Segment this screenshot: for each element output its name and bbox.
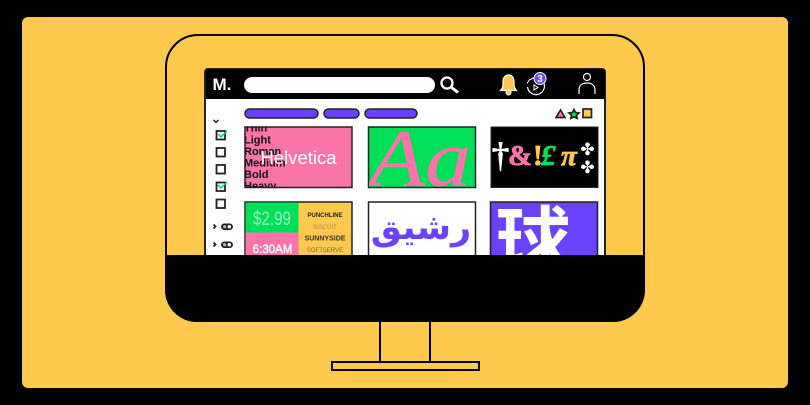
card: type samples bbox=[245, 202, 352, 262]
card: ornamental glyphs: £ bbox=[540, 140, 556, 172]
card: Helvetica weights: Medium bbox=[244, 158, 286, 170]
card: Helvetica weights bbox=[244, 122, 352, 192]
icon: history with badge: 3 bbox=[537, 74, 543, 85]
font names: BISCUIT bbox=[313, 225, 337, 231]
card: Helvetica weights: Light bbox=[244, 134, 271, 146]
sidebar filters bbox=[214, 120, 233, 248]
card: ornamental glyphs: π bbox=[561, 140, 578, 172]
icon: bell bbox=[500, 75, 516, 95]
filter pills bbox=[245, 109, 417, 118]
chevron bbox=[214, 120, 218, 122]
checkboxes bbox=[216, 131, 225, 208]
icon: user bbox=[579, 74, 595, 94]
card: Helvetica weights: Bold bbox=[244, 169, 268, 181]
shape filter icons bbox=[556, 109, 592, 118]
card: Arabic sample: رشيق bbox=[371, 208, 471, 248]
card: Helvetica weights: Helvetica bbox=[260, 147, 337, 168]
check marks bbox=[218, 131, 227, 188]
toggle rows bbox=[214, 224, 233, 248]
icon: history with badge bbox=[527, 72, 546, 95]
card: CJK glyph: 球 bbox=[495, 182, 571, 290]
card: Helvetica weights: Heavy bbox=[244, 180, 277, 192]
card: ornamental glyphs bbox=[491, 127, 598, 188]
search field bbox=[244, 77, 435, 93]
font names: PUNCHLINE bbox=[307, 213, 343, 219]
font names: SOFTSERVE bbox=[307, 248, 343, 254]
card: ornamental glyphs: ✤ bbox=[580, 158, 595, 177]
header bar bbox=[206, 69, 605, 99]
card: ornamental glyphs: ! bbox=[533, 140, 543, 172]
card: Arabic sample bbox=[368, 202, 476, 262]
logo: M. bbox=[212, 75, 231, 94]
card: ornamental glyphs: & bbox=[508, 140, 532, 172]
card: ornamental glyphs: ✤ bbox=[580, 140, 595, 159]
monitor black chin bbox=[165, 255, 645, 322]
card: Helvetica weights: Thin bbox=[244, 122, 267, 134]
monitor body bbox=[166, 35, 644, 321]
screen bbox=[205, 69, 605, 290]
font names: SUNNYSIDE bbox=[305, 236, 346, 242]
font names bbox=[305, 213, 346, 254]
monitor stand bbox=[332, 320, 479, 370]
card: type samples: $2.99 bbox=[253, 209, 291, 230]
card: Aa italic serif: Aa bbox=[363, 114, 471, 204]
price tile bbox=[246, 202, 298, 232]
card: Helvetica weights: Roman bbox=[244, 146, 282, 158]
card: ornamental glyphs: † bbox=[492, 135, 510, 175]
time tile bbox=[246, 232, 298, 262]
card: type samples: 6:30AM bbox=[253, 244, 292, 256]
icon: search bbox=[442, 78, 458, 92]
